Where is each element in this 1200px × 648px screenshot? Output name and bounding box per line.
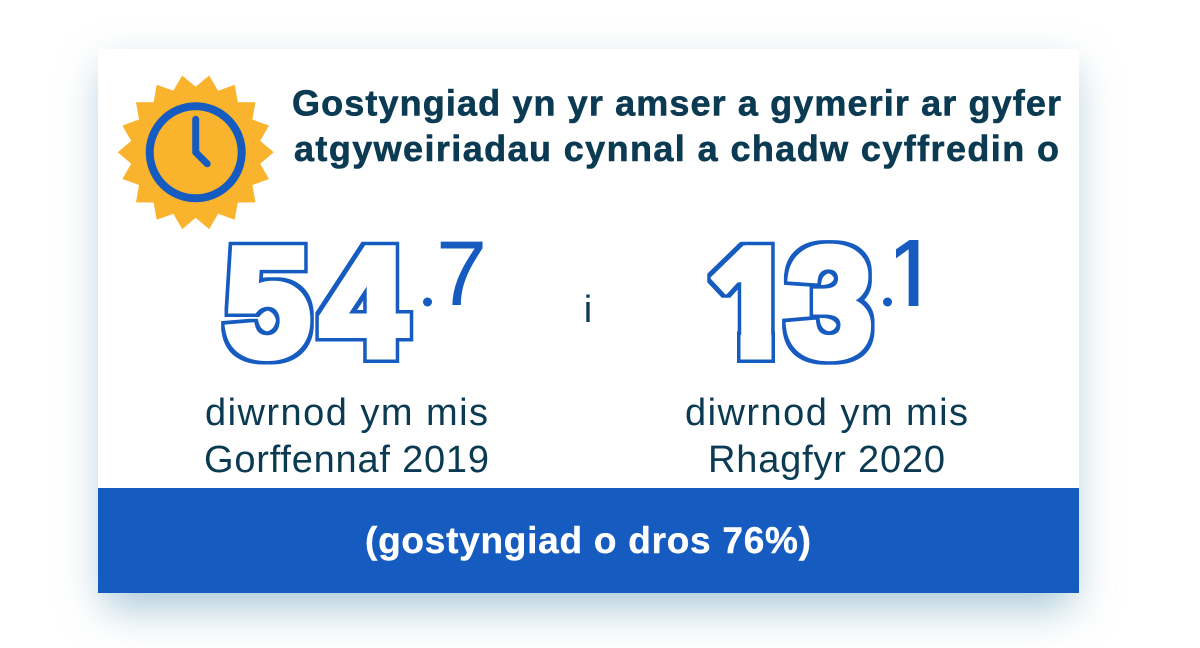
panel: card bbox=[98, 49, 1079, 593]
figure: 54.7 days: 5 bbox=[225, 217, 310, 388]
figure: 13.1 days: 1 bbox=[710, 217, 795, 388]
label: December 2020: diwrnod ym mis bbox=[685, 392, 968, 434]
figure: 13.1 days: 3 bbox=[787, 217, 872, 388]
card shadow bbox=[104, 68, 1073, 608]
figure: 54.7 days: 4 bbox=[321, 217, 406, 388]
icon: clock in sunburst badge bbox=[118, 76, 274, 229]
figure: 54.7 days: 7 bbox=[436, 223, 487, 325]
title: Gostyngiad yn yr amser a gymerir ar gyfer bbox=[292, 82, 1061, 124]
label: December 2020 bbox=[685, 392, 968, 481]
title bbox=[292, 82, 1061, 169]
label: July 2019: diwrnod ym mis bbox=[205, 392, 488, 434]
figure: 54.7 days bbox=[225, 217, 487, 388]
label: December 2020: Rhagfyr 2020 bbox=[708, 439, 945, 481]
connector word: i bbox=[584, 289, 592, 331]
footer band bbox=[98, 488, 1079, 593]
label: July 2019: Gorffennaf 2019 bbox=[204, 439, 489, 481]
label: July 2019 bbox=[204, 392, 489, 481]
figure: 13.1 days bbox=[707, 240, 918, 365]
title: atgyweiriadau cynnal a chadw cyffredin o bbox=[294, 128, 1059, 169]
figure: 13.1 days: 1 bbox=[881, 217, 942, 340]
footer text: (gostyngiad o dros 76%) bbox=[365, 520, 811, 561]
